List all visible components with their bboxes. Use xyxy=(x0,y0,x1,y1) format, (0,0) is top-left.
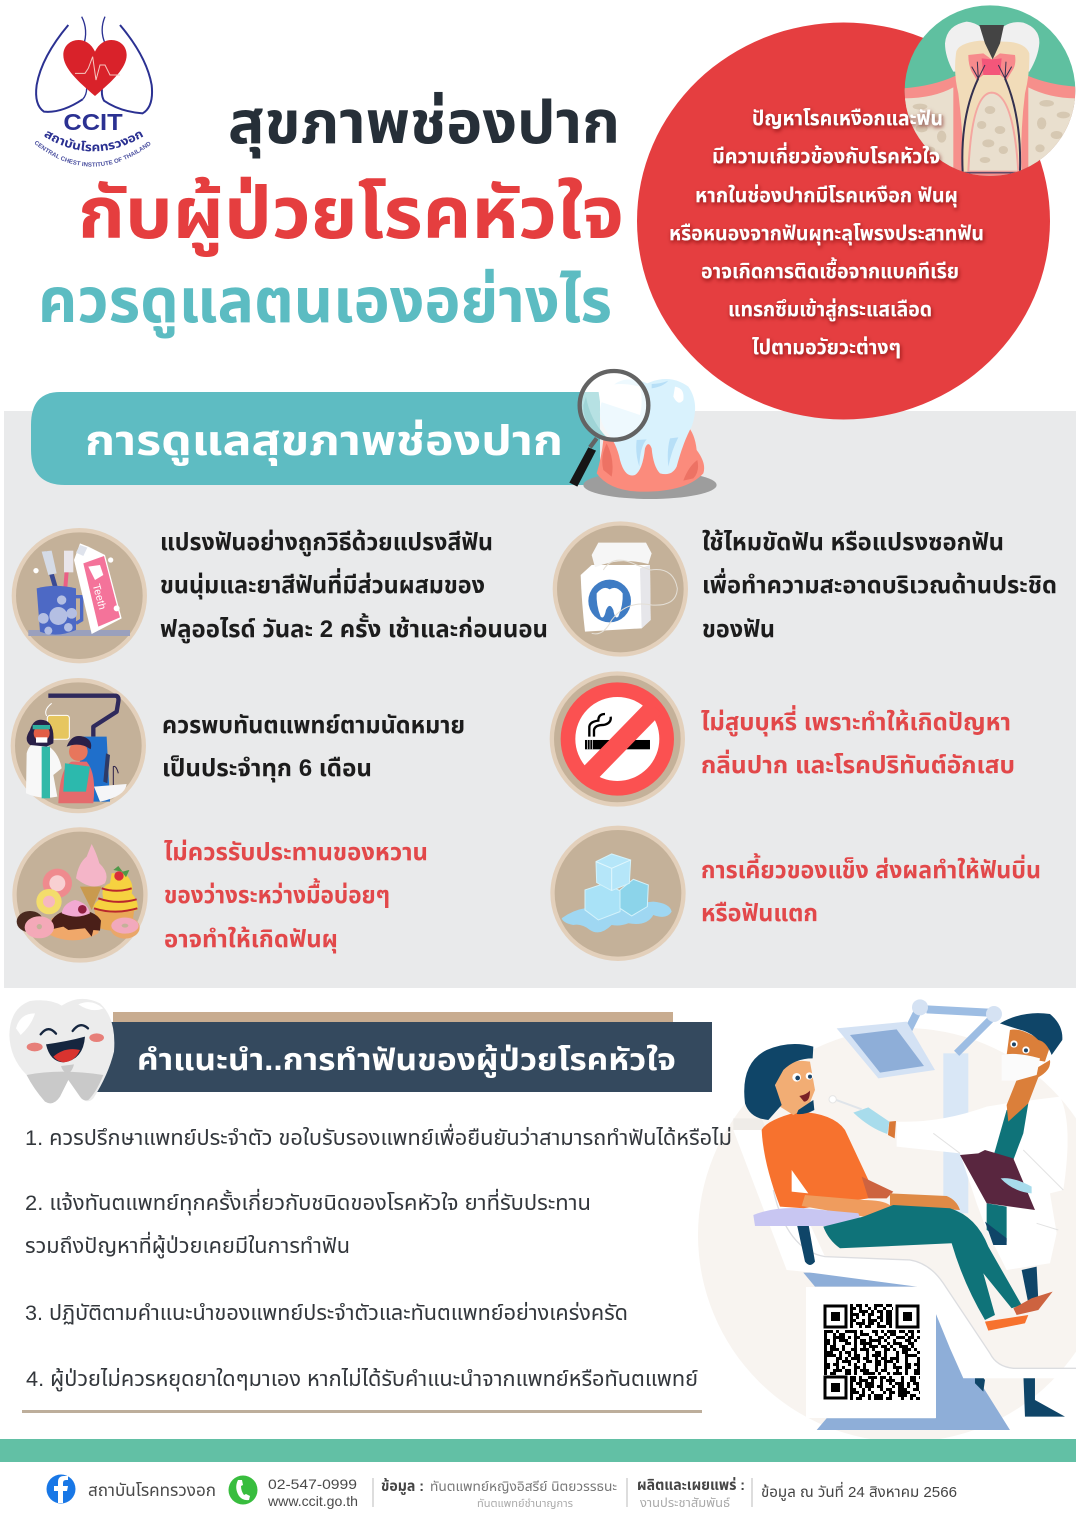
heading pill: oral health care xyxy=(31,392,600,485)
heading bar: dental advice for heart patients: คำแนะนำ..การทำฟันของผู้ป่วยโรคหัวใจ xyxy=(137,1044,676,1078)
callout text: gum disease and heart disease: ไปตามอวัยวะต่างๆ xyxy=(752,337,901,359)
advice list: รวมถึงปัญหาที่ผู้ป่วยเคยมีในการทำฟัน xyxy=(25,1231,350,1259)
QR code xyxy=(806,1287,936,1418)
advice list: 2. แจ้งทันตแพทย์ทุกครั้งเกี่ยวกับชนิดของโรคหัวใจ ยาที่รับประทาน xyxy=(25,1188,591,1216)
title: ควรดูแลตนเองอย่างไร xyxy=(38,267,612,339)
heading bar: dental advice for heart patients xyxy=(95,1012,712,1092)
care text: dentist visit: ควรพบทันตแพทย์ตามนัดหมาย xyxy=(162,712,465,739)
red circle callout xyxy=(637,22,1050,420)
care text: brushing: แปรงฟันอย่างถูกวิธีด้วยแปรงสีฟัน xyxy=(160,528,493,557)
title: สุขภาพช่องปาก xyxy=(228,89,620,159)
care item: dentist visit icon xyxy=(11,678,146,813)
care text: no smoking warning: ไม่สูบบุหรี่ เพราะทำให้เกิดปัญหา xyxy=(701,705,1011,737)
care item: ice cubes icon xyxy=(550,826,686,961)
care text: flossing: ของฟัน xyxy=(702,616,775,643)
footer: producer credit xyxy=(637,1476,745,1510)
care text: dentist visit xyxy=(162,712,465,783)
care text: sweets warning xyxy=(164,838,428,954)
care text: sweets warning: อาจทำให้เกิดฟันผุ xyxy=(164,925,338,954)
title xyxy=(38,89,624,339)
care item: dental floss icon xyxy=(553,521,688,657)
care text: flossing xyxy=(702,528,1057,643)
care text: flossing: เพื่อทำความสะอาดบริเวณด้านประชิด xyxy=(702,568,1057,599)
care item: no smoking icon xyxy=(550,671,685,807)
footer: data date: ข้อมูล ณ วันที่ 24 สิงหาคม 2566 xyxy=(761,1481,957,1501)
logo: CCIT: สถาบันโรคทรวงอก xyxy=(44,131,144,152)
advice list xyxy=(25,1123,732,1392)
care item: toothbrush and toothpaste icon xyxy=(12,528,147,663)
care text: brushing xyxy=(160,528,548,644)
panel: grey care section background xyxy=(4,411,1076,988)
advice list: 4. ผู้ป่วยไม่ควรหยุดยาใดๆมาเอง หากไม่ได้รับคำแนะนำจากแพทย์หรือทันตแพทย์ xyxy=(26,1367,698,1392)
footer: information credit: ข้อมูล : xyxy=(381,1477,424,1496)
footer: phone and website xyxy=(228,1476,358,1509)
title: กับผู้ป่วยโรคหัวใจ xyxy=(78,174,624,257)
care text: chewing ice warning: การเคี้ยวของแข็ง ส่งผลทำให้ฟันบิ่น xyxy=(701,853,1041,884)
callout text: gum disease and heart disease: หรือหนองจากฟันผุทะลุโพรงประสาทฟัน xyxy=(669,223,984,245)
advice list: 3. ปฏิบัติตามคำแนะนำของแพทย์ประจำตัวและทันตแพทย์อย่างเคร่งครัด xyxy=(25,1301,628,1325)
footer: information credit xyxy=(381,1477,617,1510)
callout text: gum disease and heart disease: แทรกซึมเข้าสู่กระแสเลือด xyxy=(728,299,932,321)
footer: producer credit: ผลิตและเผยแพร่ : xyxy=(637,1476,745,1494)
icon: smiling tooth mascot xyxy=(9,999,114,1103)
footer band xyxy=(0,1439,1076,1462)
callout text: gum disease and heart disease: ปัญหาโรคเหงือกและฟัน xyxy=(752,108,943,130)
icon: tooth cross-section xyxy=(903,5,1076,180)
footer: phone and website: 02-547-0999 xyxy=(268,1476,357,1492)
care text: sweets warning: ไม่ควรรับประทานของหวาน xyxy=(164,838,428,866)
logo: CCIT: CCIT xyxy=(63,109,123,135)
logo: CCIT: CENTRAL CHEST INSTITUTE OF THAILAND xyxy=(34,141,150,167)
callout text: gum disease and heart disease: อาจเกิดการติดเชื้อจากแบคทีเรีย xyxy=(701,257,959,283)
heading pill: oral health care: การดูแลสุขภาพช่องปาก xyxy=(85,417,563,466)
care text: no smoking warning xyxy=(701,705,1015,779)
care text: flossing: ใช้ไหมขัดฟัน หรือแปรงซอกฟัน xyxy=(702,528,1004,556)
illustration: dentist and patient in chair xyxy=(698,999,1076,1442)
advice list: 1. ควรปรึกษาแพทย์ประจำตัว ขอใบรับรองแพทย์เพื่อยืนยันว่าสามารถทำฟันได้หรือไม่ xyxy=(25,1123,732,1150)
logo: CCIT xyxy=(34,16,154,167)
care item: sweets icon xyxy=(12,827,148,963)
footer: phone and website: www.ccit.go.th xyxy=(267,1493,358,1509)
icon: tooth with magnifier xyxy=(569,371,717,499)
care text: sweets warning: ของว่างระหว่างมื้อบ่อยๆ xyxy=(164,878,390,909)
care text: no smoking warning: กลิ่นปาก และโรคปริทันต์อักเสบ xyxy=(701,749,1015,779)
footer: producer credit: งานประชาสัมพันธ์ xyxy=(640,1496,730,1510)
footer: facebook contact: สถาบันโรคทรวงอก xyxy=(88,1481,216,1500)
care text: dentist visit: เป็นประจำทุก 6 เดือน xyxy=(162,755,372,783)
care text: chewing ice warning xyxy=(701,853,1041,927)
care item: toothbrush and toothpaste icon: Teeth xyxy=(90,583,108,611)
care text: brushing: ฟลูออไรด์ วันละ 2 ครั้ง เช้าและก่อนนอน xyxy=(160,613,548,644)
footer: information credit: ทันตแพทย์หญิงอิสรีย์ นิตยวรรธนะ xyxy=(430,1479,617,1494)
callout text: gum disease and heart disease xyxy=(669,108,984,359)
callout text: gum disease and heart disease: หากในช่องปากมีโรคเหงือก ฟันผุ xyxy=(695,185,958,207)
callout text: gum disease and heart disease: มีความเกี่ยวข้องกับโรคหัวใจ xyxy=(712,142,940,168)
care text: chewing ice warning: หรือฟันแตก xyxy=(701,900,818,927)
footer: facebook contact xyxy=(46,1474,216,1504)
care text: brushing: ขนนุ่มและยาสีฟันที่มีส่วนผสมของ xyxy=(160,568,485,600)
footer: information credit: ทันตแพทย์ชำนาญการ xyxy=(477,1498,573,1510)
